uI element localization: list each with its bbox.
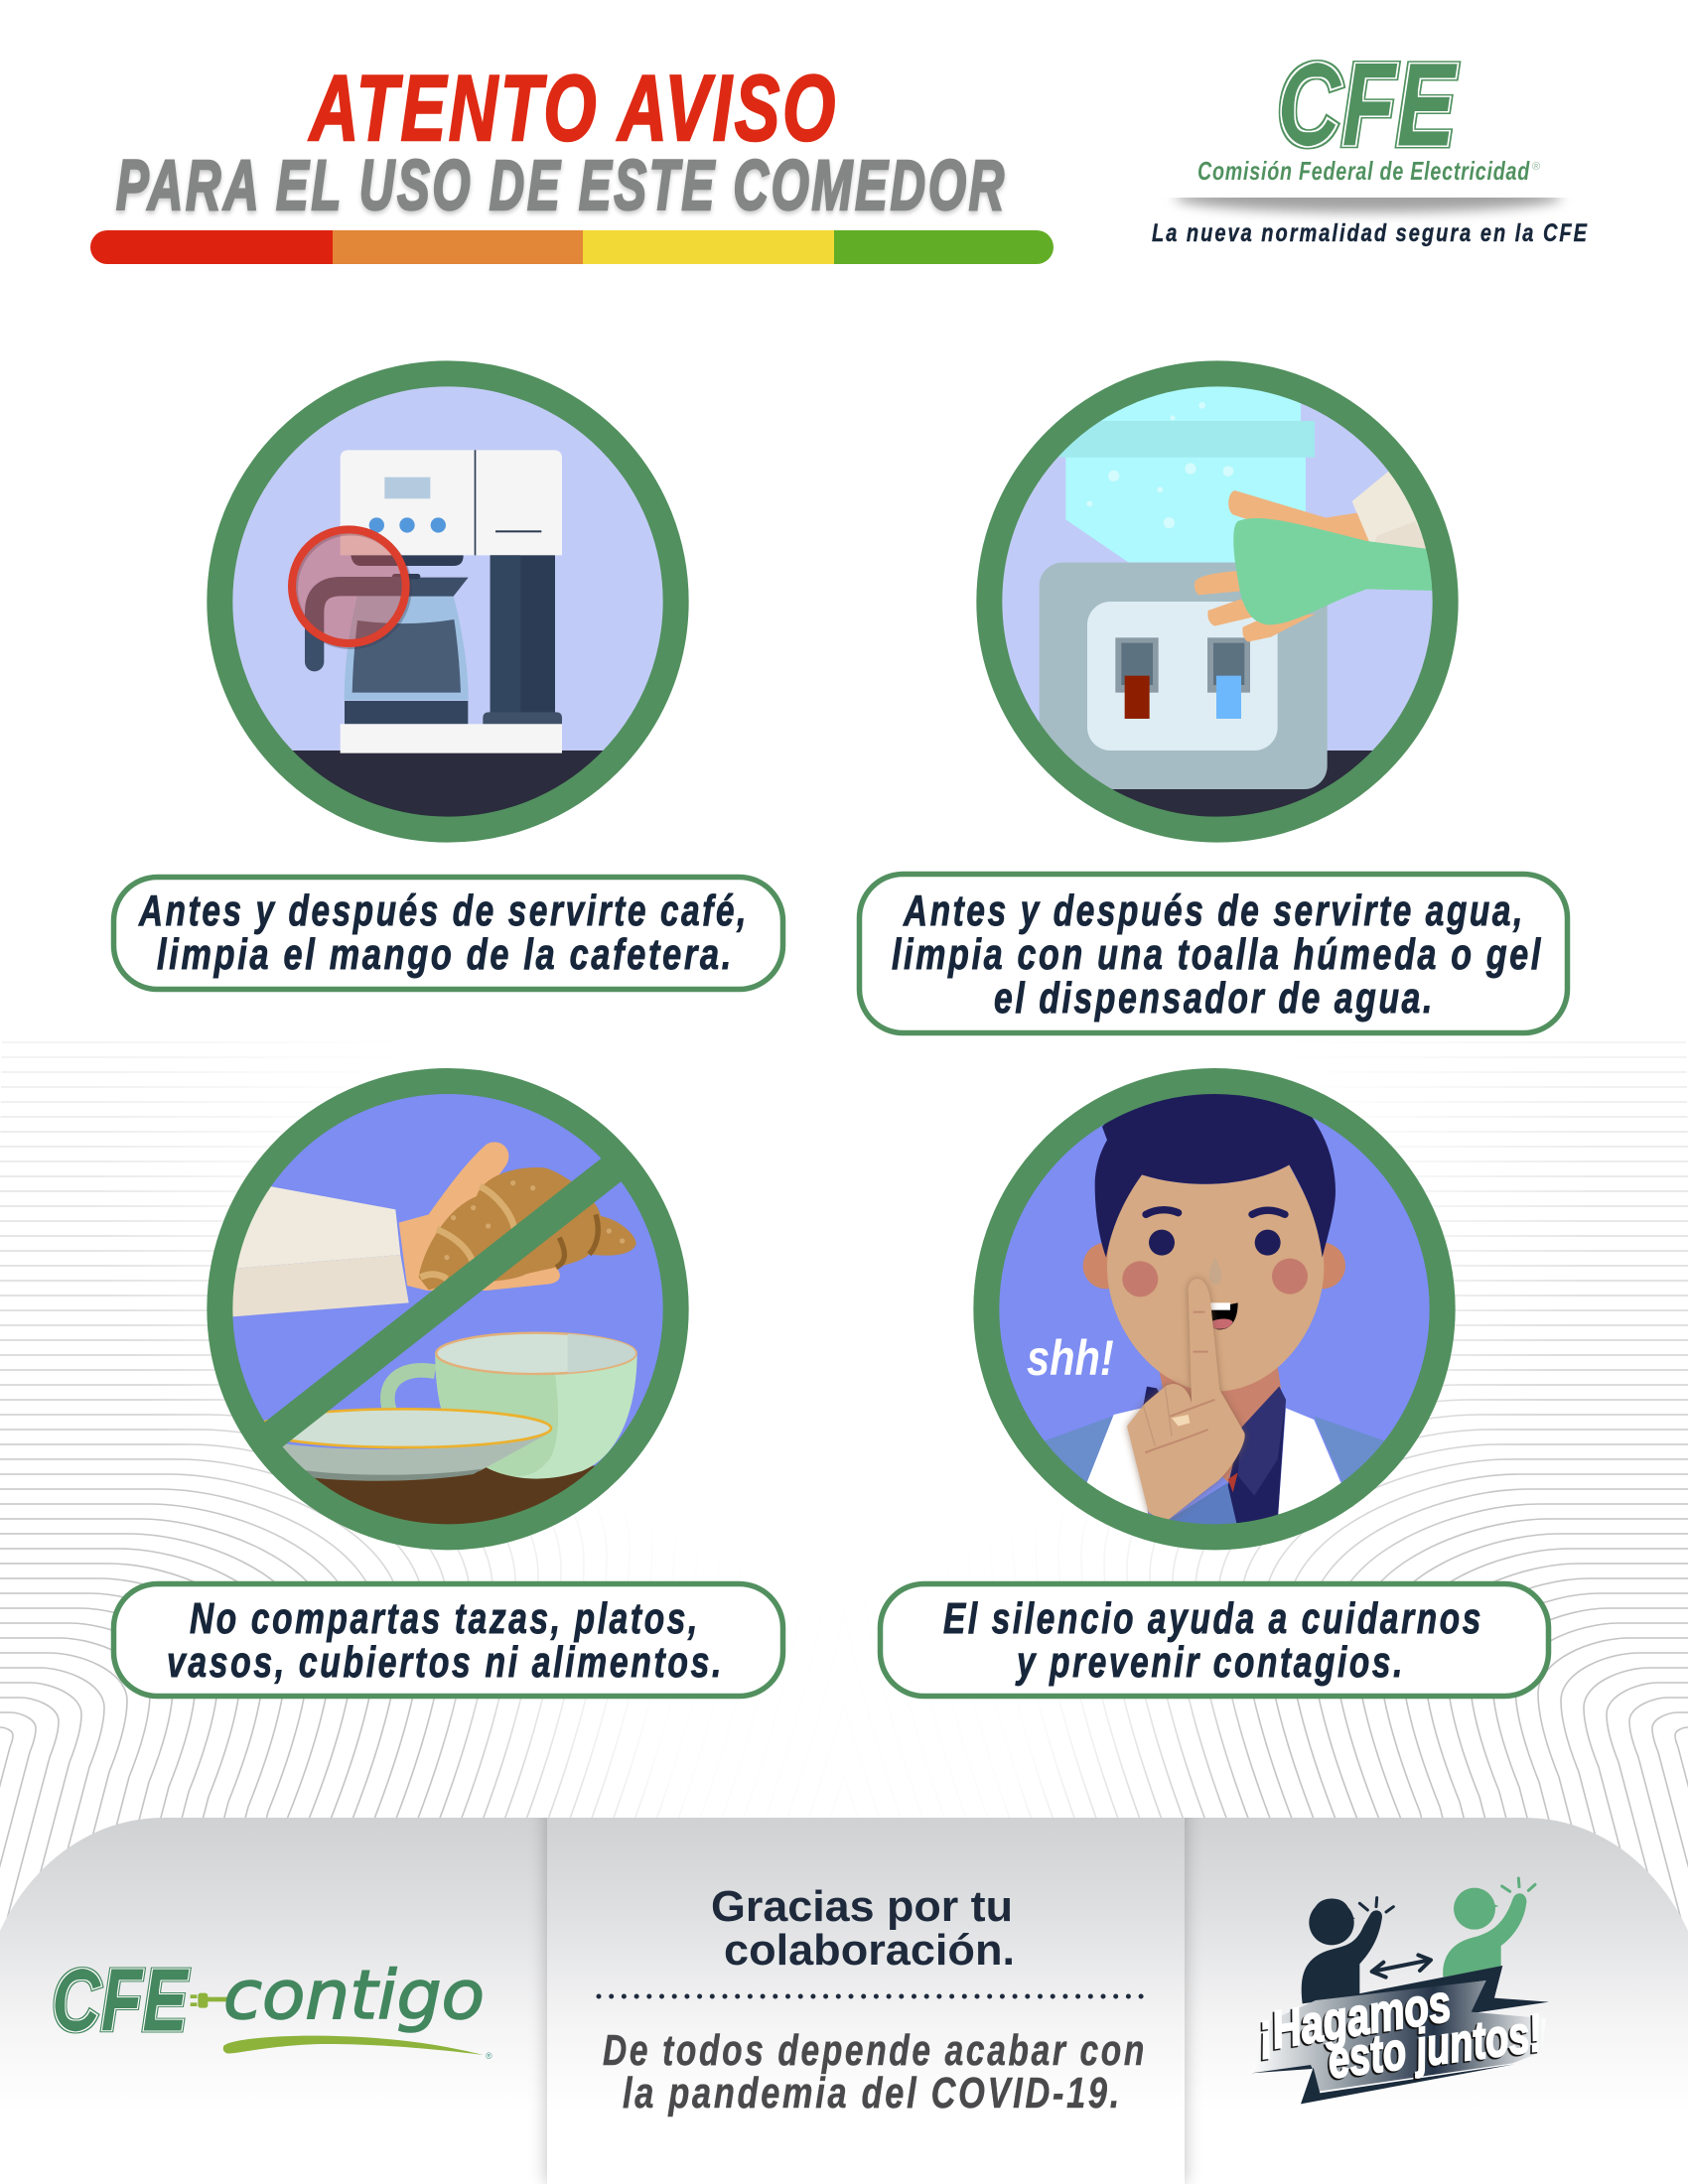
- logo shadow: [1172, 198, 1565, 220]
- caption: no sharing: [113, 1584, 782, 1696]
- dotted divider: [599, 1993, 1142, 1999]
- CFE logo: Comisión Federal de Electricidad: [1197, 156, 1530, 186]
- caption: coffee: Antes y después de servirte café,: [138, 887, 749, 935]
- traffic light colour bar: [90, 230, 1054, 264]
- covid message: [603, 2026, 1147, 2117]
- distance arrow: [1372, 1955, 1431, 1978]
- panel: silence icon: [976, 1065, 1460, 1556]
- CFE contigo logo: ®: [486, 2051, 492, 2061]
- covid message: la pandemia del COVID-19.: [623, 2069, 1122, 2117]
- panel: water dispenser icon: [976, 360, 1460, 850]
- green figure: [1443, 1878, 1535, 1978]
- caption: no sharing: No compartas tazas, platos,: [190, 1594, 700, 1643]
- CFE contigo logo: contigo: [223, 1957, 485, 2035]
- banner text: esto juntos!: [1325, 2003, 1545, 2090]
- tagline: La nueva normalidad segura en la CFE: [1152, 219, 1589, 247]
- caption: water: [860, 874, 1567, 1032]
- caption: silence: El silencio ayuda a cuidarnos: [943, 1594, 1483, 1643]
- caption: silence: y prevenir contagios.: [1015, 1638, 1405, 1687]
- caption: silence: [880, 1584, 1549, 1696]
- CFE logo: ®: [1532, 161, 1540, 173]
- thank-you message: [711, 1882, 1015, 1975]
- CFE contigo logo: [52, 1951, 492, 2061]
- shh label: shh!: [1027, 1330, 1114, 1386]
- covid message: De todos depende acabar con: [603, 2026, 1147, 2075]
- banner: [1251, 1966, 1549, 2104]
- banner text: [1254, 1974, 1545, 2090]
- thank-you message: Gracias por tu: [711, 1882, 1013, 1931]
- banner text: ¡Hagamos: [1254, 1974, 1455, 2062]
- CFE logo: [1197, 40, 1540, 186]
- caption: water: el dispensador de agua.: [994, 974, 1435, 1023]
- subtitle: para el uso de este comedor: PARA EL USO DE ESTE COMEDOR: [116, 147, 1007, 225]
- thank-you message: colaboración.: [724, 1926, 1015, 1975]
- dark figure: [1302, 1898, 1393, 2003]
- caption: coffee: limpia el mango de la cafetera.: [157, 930, 734, 979]
- hagamos esto juntos logo: [1251, 1878, 1549, 2104]
- CFE contigo logo: CFE: [52, 1951, 190, 2049]
- caption: coffee: [113, 878, 782, 989]
- caption: no sharing: vasos, cubiertos ni alimentos.: [167, 1638, 724, 1687]
- CFE logo: CFE: [1277, 40, 1459, 171]
- title: atento aviso: ATENTO AVISO: [309, 56, 838, 160]
- footer panel: [0, 1802, 1688, 2184]
- panel: no sharing icon: [209, 1065, 692, 1559]
- panel: coffee maker icon: [209, 360, 688, 850]
